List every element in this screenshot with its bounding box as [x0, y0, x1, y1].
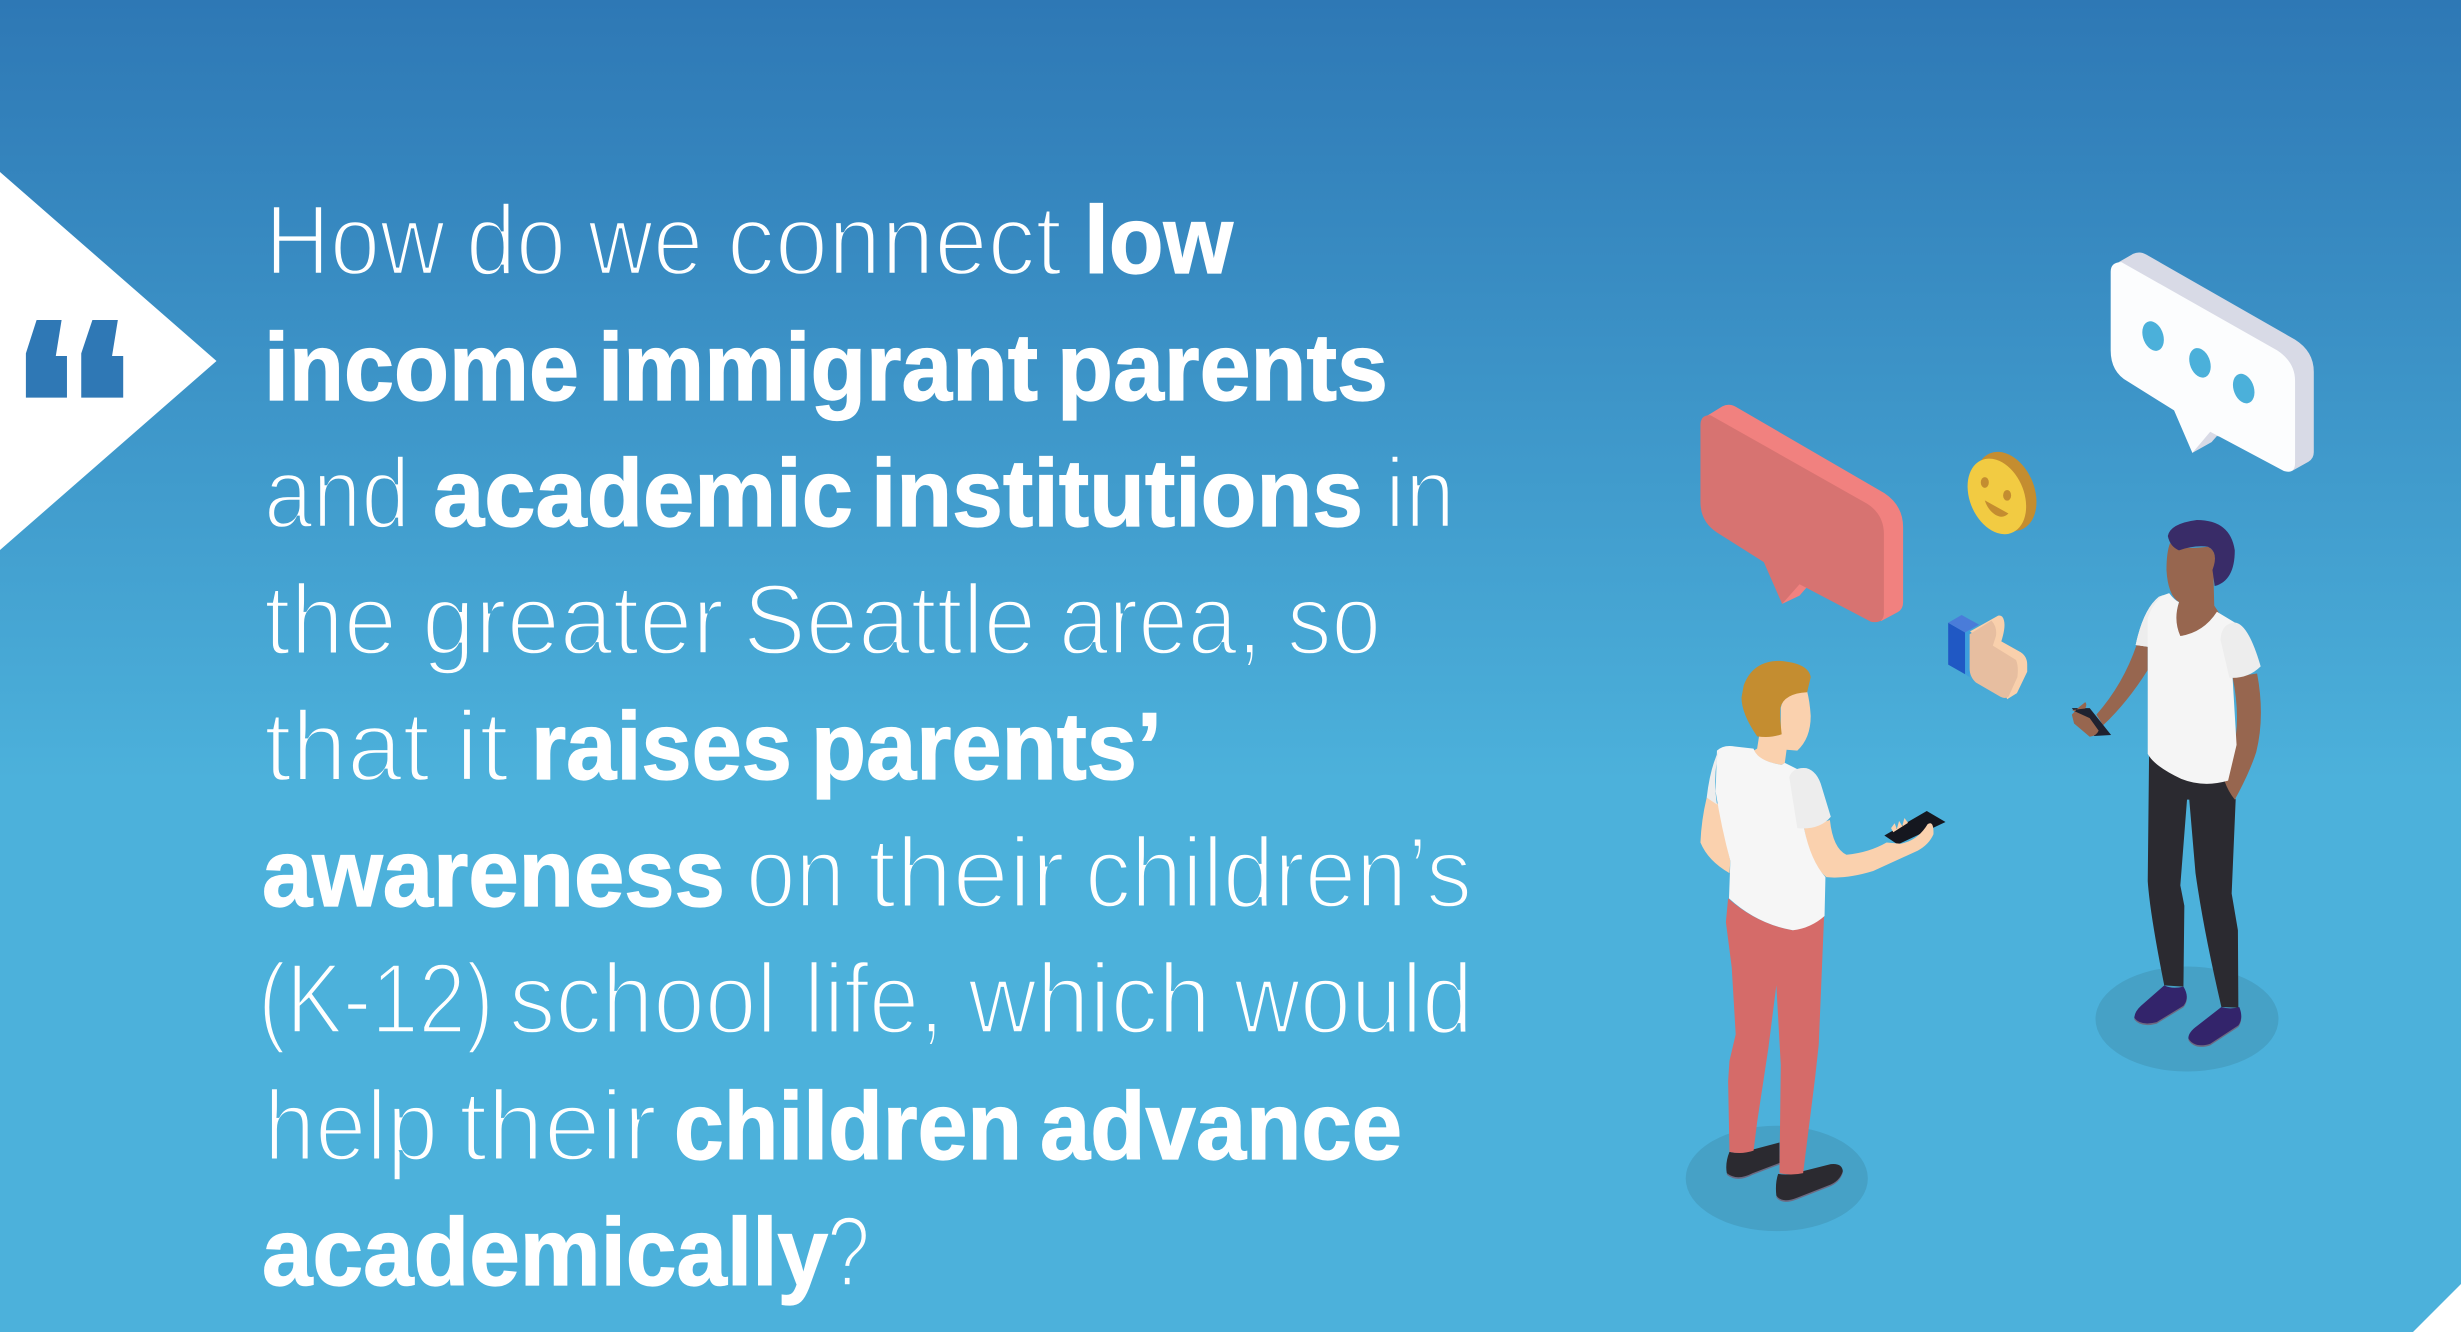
line 3: in [1385, 438, 1455, 550]
hair [1742, 661, 1811, 737]
phone [1884, 811, 1946, 845]
line 7: which [967, 943, 1211, 1055]
line 6: their [868, 817, 1065, 929]
line 4: greater [422, 564, 724, 676]
quote text [258, 184, 1473, 1308]
line 3: institutions [871, 440, 1363, 547]
head and neck [1754, 691, 1811, 765]
line 7: would [1233, 943, 1473, 1055]
icon: white speech bubble [2111, 252, 2314, 472]
line 4: so [1287, 564, 1381, 676]
line 6: awareness [262, 820, 725, 927]
line 8: their [459, 1070, 657, 1182]
line 1: connect [727, 184, 1062, 296]
line 8: children [674, 1073, 1022, 1180]
icon: thumbs up [1948, 615, 2027, 699]
line 7: school [509, 943, 777, 1055]
line 9: academically [262, 1199, 828, 1306]
line 1: do [466, 184, 566, 296]
line 4 [264, 564, 1381, 676]
upper body [2072, 520, 2261, 800]
line 1: low [1084, 187, 1233, 294]
corner notch [2413, 1284, 2461, 1332]
line 6: on [746, 817, 845, 929]
fingers [1891, 818, 1908, 832]
icon: red speech bubble [1700, 405, 1903, 622]
line 4: area, [1059, 564, 1262, 676]
shoes [1726, 1142, 1843, 1202]
front arm [1804, 820, 1933, 878]
line 6: children’s [1085, 817, 1472, 929]
line 8 [264, 1070, 1402, 1182]
quote badge [0, 172, 216, 550]
line 5: raises [531, 693, 792, 800]
line 3: and [264, 438, 410, 550]
floor shadow [1686, 1126, 1868, 1231]
line 7: life, [804, 943, 944, 1055]
line 2: income [264, 314, 579, 421]
line 5 [264, 690, 1162, 802]
line 8: help [264, 1070, 438, 1182]
line 5: it [455, 690, 509, 802]
icon: quotation marks [26, 320, 123, 398]
person: left man [1686, 661, 1946, 1231]
line 4: Seattle [743, 564, 1036, 676]
trousers [1726, 898, 1824, 1175]
line 4: the [264, 564, 397, 676]
line 7 [258, 943, 1473, 1055]
back arm [1700, 798, 1730, 873]
line 6 [262, 817, 1472, 929]
person: right man [2072, 520, 2278, 1072]
line 3: academic [433, 440, 853, 547]
line 7: (K-12) [258, 943, 494, 1055]
line 3 [264, 438, 1455, 550]
floor shadow [2096, 966, 2278, 1072]
icon: smiley [1958, 447, 2046, 539]
trousers and shoes [2134, 755, 2241, 1047]
line 1 [265, 184, 1233, 296]
line 1: we [587, 184, 703, 296]
line 5: parents’ [811, 693, 1162, 800]
line 2: parents [1057, 314, 1388, 421]
sleeves [1707, 750, 1831, 828]
line 1: How [265, 184, 446, 296]
line 9: ? [827, 1196, 870, 1308]
illustration: two people chatting [1686, 252, 2314, 1231]
line 2 [264, 314, 1388, 421]
line 8: advance [1040, 1073, 1402, 1180]
line 5: that [264, 690, 430, 802]
shirt [1716, 746, 1825, 930]
line 2: immigrant [598, 314, 1038, 421]
